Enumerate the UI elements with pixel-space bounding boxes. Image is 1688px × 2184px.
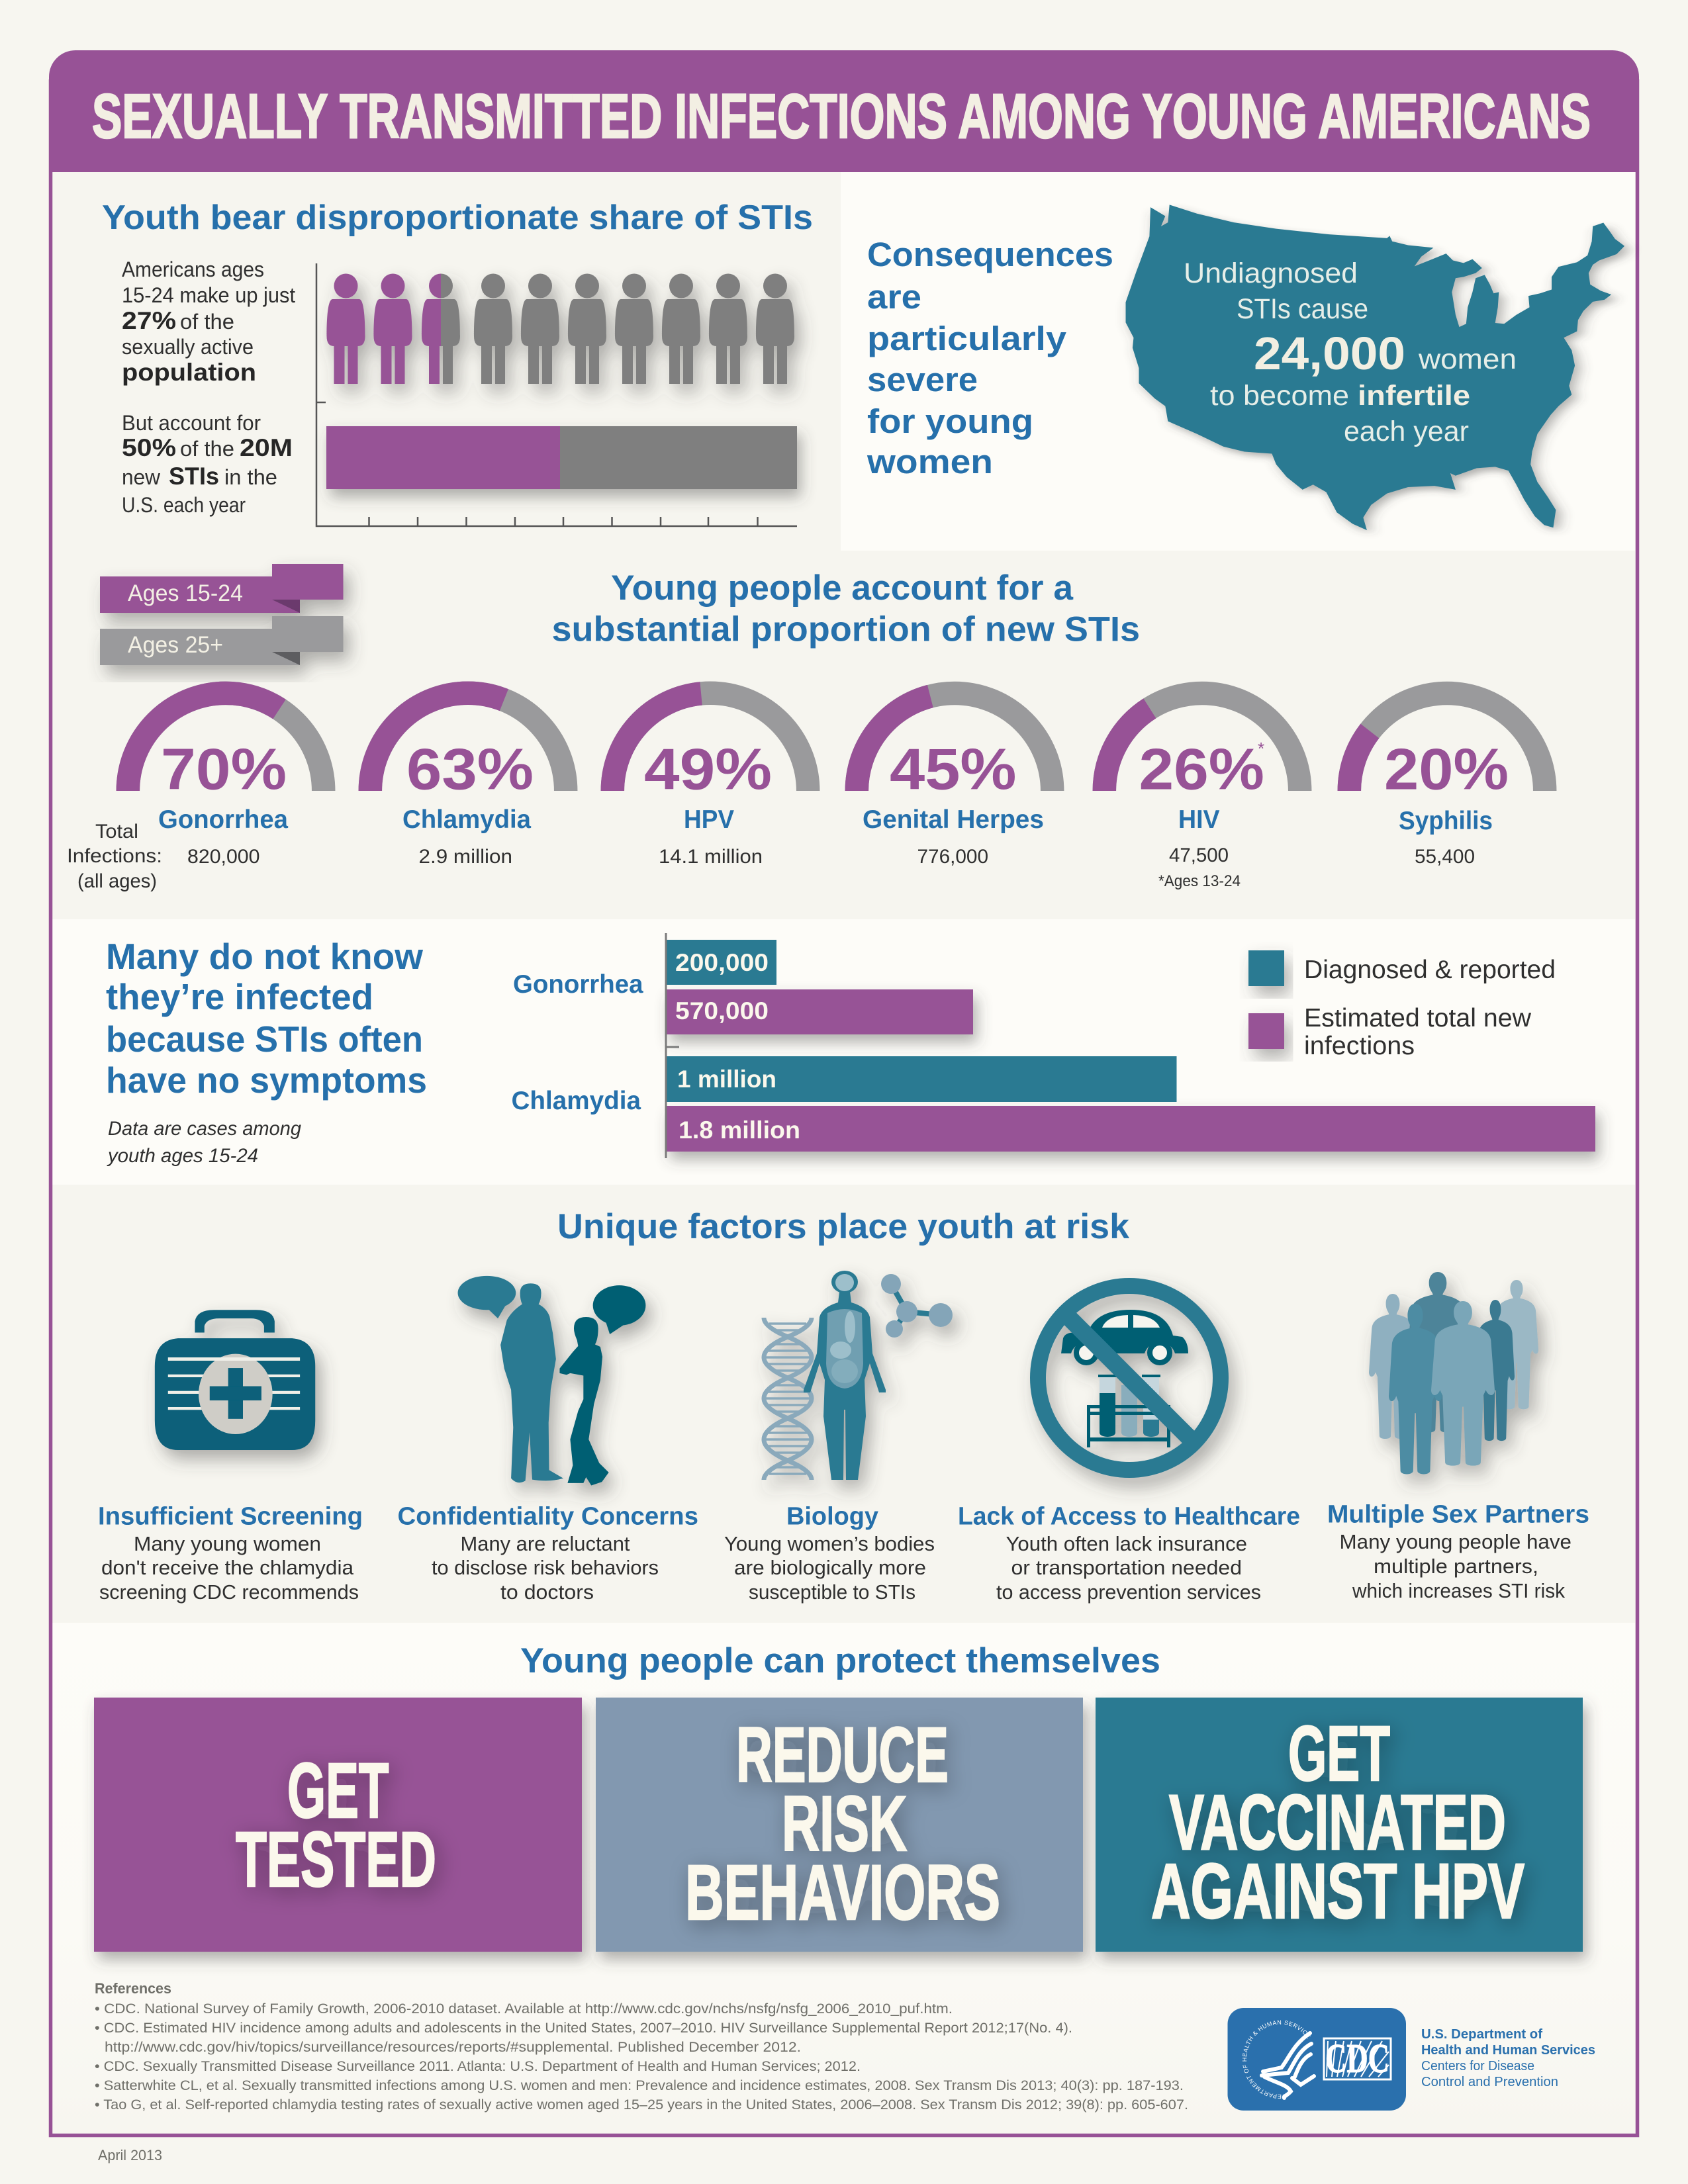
factor: biology: are biologically more	[734, 1556, 926, 1579]
legend: Estimated total new	[1304, 1004, 1532, 1032]
factor: insufficient screening: Insufficient Screening	[98, 1502, 363, 1530]
bar chart: diagnosed vs estimated: 200,000	[675, 949, 769, 976]
text block: infection share: in the	[224, 465, 277, 489]
gauge: gonorrhea 70%	[128, 693, 324, 868]
text block: infection share	[122, 411, 293, 517]
text block: population share: of the	[180, 310, 234, 334]
panel: consequences	[867, 205, 1624, 530]
gauge: gonorrhea 70%: 70%	[161, 736, 287, 802]
map text: infertility statistic: 24,000	[1254, 328, 1405, 379]
gauge: genital herpes 45%	[857, 693, 1053, 868]
logo text: U.S. Department of	[1421, 2027, 1542, 2042]
heading: consequences: severe	[867, 361, 978, 398]
logo text: Health and Human Services	[1421, 2043, 1595, 2058]
heading	[106, 936, 427, 1101]
gauge: HIV 26%: 47,500	[1169, 844, 1229, 866]
legend: Diagnosed & reported	[1304, 956, 1556, 984]
action box: get tested: TESTED	[236, 1816, 436, 1903]
panel: many do not know	[106, 933, 1595, 1167]
heading: consequences: particularly	[867, 320, 1067, 357]
references: • CDC. Estimated HIV incidence among adults and adolescents in the United States, 2007–2010. HIV Surveillance Supplemental Report 2012;17(No. 4).	[95, 2021, 1072, 2036]
heading: consequences: women	[867, 443, 993, 480]
references: • CDC. Sexually Transmitted Disease Surveillance 2011. Atlanta: U.S. Department of Health and Human Services; 2012.	[95, 2059, 861, 2074]
map text: infertility statistic: infertile	[1358, 380, 1470, 412]
bar chart: diagnosed vs estimated: 1.8 million	[679, 1116, 800, 1144]
map text: infertility statistic: to become	[1210, 380, 1349, 412]
gauge: HIV 26%: HIV	[1178, 805, 1219, 834]
icon: medical bag	[155, 1310, 315, 1450]
icon: HHS seal	[1242, 2020, 1316, 2100]
row label: total infections: Infections:	[67, 845, 162, 867]
legend ribbon: ages 25+	[100, 616, 343, 665]
icon: DNA, body and molecule	[764, 1271, 953, 1480]
action box: get vaccinated: VACCINATED	[1169, 1779, 1506, 1866]
text block: population share: sexually active	[122, 335, 254, 359]
factor: lack of access	[958, 1502, 1300, 1604]
heading	[552, 569, 1140, 649]
heading: Youth bear disproportionate share of STIs	[102, 199, 813, 237]
panel: protect themselves	[94, 1641, 1583, 1952]
heading: because STIs often	[106, 1019, 423, 1060]
factor: confidentiality concerns: Many are reluctant	[461, 1532, 630, 1555]
row label: total infections: (all ages)	[77, 870, 157, 892]
factor: confidentiality concerns	[397, 1502, 698, 1604]
gauge: genital herpes 45%: 45%	[890, 736, 1017, 802]
map text: infertility statistic: Undiagnosed	[1184, 257, 1358, 289]
factor: insufficient screening: don't receive the chlamydia	[101, 1556, 354, 1579]
factor: lack of access: to access prevention services	[996, 1580, 1261, 1604]
bar: 50 percent of new STIs	[326, 426, 797, 489]
text block: infection share: STIs	[169, 463, 219, 490]
gauge: gonorrhea 70%: 820,000	[187, 846, 259, 868]
icon: human body	[804, 1271, 886, 1480]
factor: insufficient screening: Many young women	[134, 1532, 321, 1555]
text block: infection share: of the	[180, 437, 234, 461]
bar chart: diagnosed vs estimated: Chlamydia	[511, 1087, 641, 1115]
action box: get tested: GET	[287, 1747, 389, 1835]
action box: reduce risk behaviors: BEHAVIORS	[685, 1849, 1000, 1936]
text block: infection share: But account for	[122, 411, 261, 435]
action box: get tested	[94, 1698, 582, 1952]
references: • Tao G, et al. Self-reported chlamydia testing rates of sexually active women aged 15–25 years in the United States, 2006–2008. Sex Transm Dis 2012; 39(8): pp. 605-607.	[95, 2097, 1188, 2113]
gauge: syphilis 20%	[1349, 693, 1545, 868]
heading: consequences: for young	[867, 402, 1033, 440]
factor: biology: susceptible to STIs	[749, 1580, 915, 1604]
factor: multiple sex partners: Multiple Sex Partners	[1327, 1501, 1589, 1529]
gauge: HPV 49%: HPV	[684, 805, 734, 834]
action box: reduce risk behaviors: RISK	[782, 1780, 907, 1868]
icon: group of people	[1369, 1272, 1538, 1475]
legend: infections	[1304, 1032, 1415, 1060]
gauge: gonorrhea 70%: Gonorrhea	[158, 805, 288, 834]
text block: population share: population	[122, 359, 256, 386]
gauge: chlamydia 63%: 63%	[406, 736, 534, 802]
gauge: HIV 26%: 26%	[1139, 736, 1264, 802]
heading: substantial proportion of new STIs	[552, 610, 1140, 649]
gauge: syphilis 20%: 20%	[1384, 736, 1509, 802]
factor: biology: Biology	[786, 1502, 878, 1530]
factor: lack of access: Lack of Access to Healthcare	[958, 1502, 1300, 1530]
logo text: Centers for Disease	[1421, 2059, 1534, 2073]
gauge: syphilis 20%: Syphilis	[1399, 807, 1493, 835]
legend ribbon: ages 25+: Ages 25+	[128, 632, 223, 658]
gauge: HIV 26%: *Ages 13-24	[1158, 872, 1241, 890]
pictogram: ten people	[327, 274, 794, 384]
gauge: chlamydia 63%	[370, 693, 566, 868]
panel: youth share	[102, 199, 813, 526]
text block: infection share: U.S. each year	[122, 493, 246, 517]
bar chart: diagnosed vs estimated	[511, 933, 1595, 1158]
map: United States	[1126, 205, 1624, 530]
icon: car	[1061, 1310, 1188, 1363]
map text: infertility statistic	[1184, 257, 1517, 447]
factor: multiple sex partners	[1327, 1501, 1589, 1602]
heading: Many do not know	[106, 936, 423, 977]
text block: infection share: new	[122, 465, 161, 489]
date: April 2013	[98, 2147, 162, 2163]
gauge: chlamydia 63%: Chlamydia	[402, 805, 531, 834]
map text: infertility statistic: STIs cause	[1237, 293, 1368, 325]
panel: substantial proportion	[67, 564, 1545, 892]
icon: CDC mark: CDC	[1325, 2036, 1389, 2081]
text block: infection share: 50%	[122, 434, 176, 461]
icon: test tubes in rack	[1087, 1375, 1170, 1447]
action box: get vaccinated: AGAINST HPV	[1151, 1848, 1524, 1935]
logo text	[1421, 2027, 1595, 2089]
gauge: genital herpes 45%: 776,000	[917, 846, 988, 868]
factor: multiple sex partners: Many young people have	[1340, 1530, 1571, 1553]
factor: insufficient screening	[98, 1502, 363, 1604]
action box: get vaccinated: GET	[1288, 1710, 1390, 1797]
note: data scope: youth ages 15-24	[107, 1145, 258, 1167]
note: data scope	[107, 1118, 301, 1167]
heading: consequences	[867, 236, 1113, 480]
references: http://www.cdc.gov/hiv/topics/surveillance/resources/reports/#supplemental. Published December 2012.	[105, 2040, 801, 2055]
icon: molecule	[881, 1274, 953, 1338]
references: • CDC. National Survey of Family Growth, 2006-2010 dataset. Available at http://www.cdc.gov/nchs/nsfg/nsfg_2006_2010_puf.htm.	[95, 2001, 953, 2017]
icon: DNA helix	[764, 1318, 812, 1480]
heading: they’re infected	[106, 976, 373, 1017]
heading: consequences: are	[867, 278, 921, 316]
factor: insufficient screening: screening CDC recommends	[99, 1580, 359, 1604]
heading: have no symptoms	[106, 1060, 427, 1101]
gauge: HPV 49%	[612, 693, 808, 868]
icon: HHS seal: DEPARTMENT OF HEALTH & HUMAN SERVICES • USA	[1242, 2020, 1311, 2099]
references	[95, 1980, 1188, 2113]
action box: reduce risk behaviors	[596, 1698, 1083, 1952]
note: data scope: Data are cases among	[108, 1118, 301, 1140]
factor: confidentiality concerns: to doctors	[500, 1580, 594, 1604]
heading: consequences: Consequences	[867, 236, 1113, 273]
action box: reduce risk behaviors: REDUCE	[736, 1711, 949, 1799]
logo text: Control and Prevention	[1421, 2075, 1558, 2089]
factor: confidentiality concerns: to disclose risk behaviors	[432, 1556, 659, 1579]
factor: lack of access: or transportation needed	[1011, 1556, 1242, 1579]
panel: unique factors	[98, 1207, 1589, 1604]
title banner	[49, 50, 1639, 172]
factor: biology	[724, 1502, 935, 1604]
action box: get vaccinated	[1096, 1698, 1583, 1952]
icon: adult and child talking	[458, 1276, 645, 1486]
chart axes	[316, 263, 797, 526]
legend ribbon: ages 15-24: Ages 15-24	[128, 580, 243, 606]
gauge: HPV 49%: 49%	[644, 736, 772, 802]
gauge: chlamydia 63%: 2.9 million	[418, 846, 512, 868]
text block: population share: 15-24 make up just	[122, 283, 295, 307]
heading: Young people can protect themselves	[520, 1641, 1160, 1680]
factor: multiple sex partners: which increases STI risk	[1352, 1579, 1565, 1602]
text block: population share: Americans ages	[122, 257, 264, 281]
text block: population share	[122, 257, 295, 386]
legend ribbon: ages 15-24	[100, 564, 343, 613]
factor: lack of access: Youth often lack insurance	[1006, 1532, 1247, 1555]
heading: Young people account for a	[611, 569, 1074, 608]
bar chart: diagnosed vs estimated: 570,000	[675, 997, 769, 1024]
legend	[1248, 950, 1556, 1060]
text block: population share: 27%	[122, 307, 176, 334]
factor: confidentiality concerns: Confidentiality Concerns	[397, 1502, 698, 1530]
row label: total infections: Total	[95, 821, 138, 842]
row label: total infections	[67, 821, 162, 892]
map text: infertility statistic: each year	[1344, 416, 1469, 447]
map text: infertility statistic: women	[1418, 343, 1517, 375]
gauge: HPV 49%: 14.1 million	[659, 846, 763, 868]
factor: multiple sex partners: multiple partners,	[1374, 1555, 1538, 1578]
gauge: HIV 26%	[1104, 693, 1300, 890]
gauge: syphilis 20%: 55,400	[1415, 846, 1475, 868]
references: • Satterwhite CL, et al. Sexually transmitted infections among U.S. women and men: Prevalence and incidence estimates, 2008. Sex Transm Dis 2013; 40(3): pp. 187-193.	[95, 2078, 1184, 2093]
factor: biology: Young women’s bodies	[724, 1532, 935, 1555]
bar chart: diagnosed vs estimated: 1 million	[677, 1066, 776, 1093]
bar chart: diagnosed vs estimated: Gonorrhea	[513, 970, 643, 999]
text block: infection share: 20M	[240, 434, 293, 461]
gauge: genital herpes 45%: Genital Herpes	[863, 805, 1044, 834]
gauge: HIV 26%: *	[1258, 739, 1264, 758]
references: References	[95, 1980, 171, 1997]
icon: no car or lab access	[1038, 1286, 1221, 1470]
heading: Unique factors place youth at risk	[557, 1207, 1130, 1246]
